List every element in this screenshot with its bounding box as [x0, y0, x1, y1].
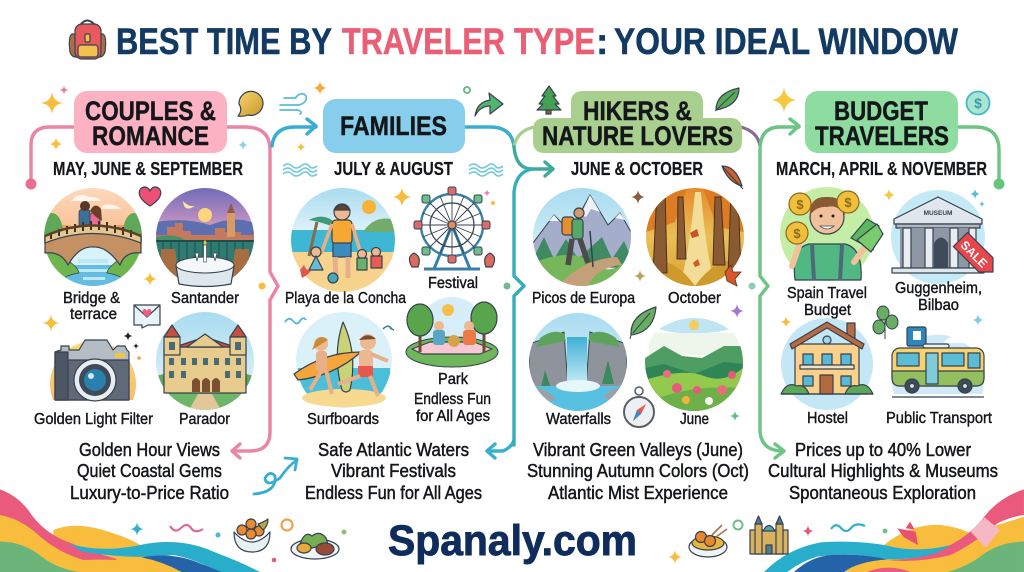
illustration: museum: MUSEUM	[924, 210, 952, 217]
highlights: hikers: Stunning Autumn Colors (Oct)	[527, 460, 749, 481]
illustration: hostel	[781, 318, 873, 410]
icon: compass	[624, 387, 654, 427]
illustration: bridge and couple	[41, 188, 145, 286]
label: Guggenheim Bilbao: Guggenheim,	[895, 280, 982, 297]
footer decoration: left icons	[130, 519, 346, 562]
heading pill: hikers	[533, 91, 742, 153]
connector dot: couples	[26, 178, 36, 190]
icon: gold speech bubble	[238, 91, 263, 116]
icon: dollar coin	[966, 92, 990, 114]
months: couples: MAY, JUNE & SEPTEMBER	[53, 158, 243, 179]
connector: families line	[272, 119, 514, 458]
highlights: budget: Prices up to 40% Lower	[795, 439, 971, 460]
illustration: Parador building	[156, 312, 254, 410]
heading pill: families: FAMILIES	[340, 111, 447, 141]
heading pill: hikers: NATURE LOVERS	[542, 121, 733, 151]
arrow: curly connector	[254, 458, 297, 494]
label: bridge and terrace: terrace	[70, 306, 117, 323]
label: Guggenheim Bilbao: Bilbao	[918, 297, 959, 314]
illustration: waterfall	[529, 313, 627, 411]
heading pill: couples: COUPLES &	[85, 96, 216, 126]
label: June: June	[680, 411, 709, 428]
label: Spain Travel Budget	[787, 285, 867, 319]
illustration: museum: SALE	[958, 238, 990, 271]
label: Santander: Santander	[171, 290, 240, 307]
illustration: Santander terrace at dusk	[156, 188, 254, 286]
highlights: budget	[768, 439, 998, 503]
icon: curry bowl	[689, 525, 727, 557]
label: Guggenheim Bilbao	[895, 280, 982, 314]
icon: leaf top	[715, 88, 739, 111]
panel: budget travelers	[768, 91, 1000, 503]
title: TYPE	[514, 21, 595, 62]
title: :	[596, 21, 608, 62]
icon: gold sparkle beside beach	[392, 188, 412, 206]
panel: families	[285, 99, 498, 503]
heading pill: budget: BUDGET	[834, 96, 928, 126]
heading pill: families	[323, 99, 465, 153]
highlights: families: Endless Fun for All Ages	[305, 482, 482, 503]
connector: couples line	[31, 127, 278, 458]
illustration: park picnic	[406, 297, 498, 367]
label: park: Endless Fun	[414, 391, 491, 408]
highlights: budget: Spontaneous Exploration	[789, 482, 976, 503]
illustration: budget traveler: $	[793, 226, 801, 241]
label: park: for All Ages	[416, 408, 490, 425]
highlights: hikers	[527, 439, 749, 503]
icon: cathedral	[750, 516, 788, 554]
label: Parador: Parador	[179, 411, 231, 428]
icon: purple sparkle	[730, 304, 744, 318]
label: Hostel: Hostel	[807, 410, 848, 427]
icon: leaf sprig	[873, 306, 898, 339]
heading pill: hikers: HIKERS &	[583, 96, 692, 126]
icon: green arrow	[475, 93, 503, 116]
icon: wave marks	[283, 164, 503, 176]
illustration: ferris wheel	[409, 187, 495, 269]
icon: love letter	[134, 305, 160, 328]
illustration: budget traveler: $	[844, 195, 852, 210]
footer decoration: right icons	[668, 516, 887, 564]
highlights: families: Safe Atlantic Waters	[318, 439, 469, 460]
icon: autumn leaf	[722, 166, 743, 189]
footer wave: right	[764, 489, 1024, 572]
illustration: budget traveler	[780, 187, 883, 281]
heading pill: budget: TRAVELERS	[815, 121, 949, 151]
label: October: October	[668, 290, 722, 307]
illustration: beach family	[291, 188, 395, 292]
illustration: museum	[891, 190, 1000, 284]
icon: dollar coin: $	[974, 95, 982, 111]
illustration: surfers	[294, 312, 392, 408]
connector: purple link	[741, 127, 760, 146]
illustration: green valley	[645, 313, 743, 411]
label: Surfboards: Surfboards	[307, 411, 379, 428]
footer brand: Spanaly.com	[388, 517, 637, 565]
highlights: families	[305, 439, 482, 503]
icon: wind lines	[280, 94, 306, 114]
icon: backpack	[69, 20, 106, 59]
icon: heart	[139, 187, 161, 206]
title: YOUR IDEAL WINDOW	[614, 21, 958, 62]
label: bridge and terrace: Bridge &	[63, 290, 120, 307]
label: Picos de Europa: Picos de Europa	[532, 290, 635, 307]
label: park	[414, 371, 491, 425]
highlights: couples: Golden Hour Views	[79, 439, 220, 460]
connector: budget line	[760, 119, 999, 458]
label: Spain Travel Budget: Spain Travel	[787, 285, 867, 302]
highlights: couples	[70, 439, 229, 503]
connector: hikers line	[514, 147, 553, 445]
highlights: couples: Quiet Coastal Gems	[77, 460, 222, 481]
icon: green leaf	[630, 307, 656, 339]
label: Playa de la Concha: Playa de la Concha	[285, 290, 406, 307]
title: BEST TIME BY	[116, 21, 332, 62]
title	[116, 21, 958, 62]
highlights: hikers: Vibrant Green Valleys (June)	[533, 439, 743, 460]
connector: sage link	[514, 127, 535, 147]
label: Waterfalls: Waterfalls	[546, 411, 611, 428]
heading pill: budget	[805, 91, 958, 153]
illustration: autumn forest	[646, 188, 744, 286]
icon: salad plate	[291, 533, 339, 559]
icon: pine tree	[537, 86, 561, 114]
title: TRAVELER	[342, 21, 505, 62]
label: park: Park	[438, 371, 469, 388]
months: hikers: JUNE & OCTOBER	[571, 158, 703, 179]
decorative accents: sparkles and dots	[41, 81, 985, 421]
label: Golden Light Filter: Golden Light Filter	[34, 411, 154, 428]
footer wave: left	[0, 489, 260, 572]
label: Festival: Festival	[428, 275, 478, 292]
illustration: budget traveler: $	[796, 197, 804, 212]
label: Public Transport: Public Transport	[886, 410, 993, 427]
highlights: budget: Cultural Highlights & Museums	[768, 460, 998, 481]
panel: couples and romance	[34, 91, 254, 503]
connector dot: budget	[994, 178, 1004, 190]
heading pill: couples: ROMANCE	[92, 121, 209, 151]
highlights: families: Vibrant Festivals	[331, 460, 456, 481]
months: families: JULY & AUGUST	[334, 158, 454, 179]
heading pill: couples	[74, 91, 227, 153]
illustration: camera	[50, 340, 136, 401]
panel: hikers and nature lovers	[527, 91, 749, 503]
label: Spain Travel Budget: Budget	[804, 302, 852, 319]
highlights: hikers: Atlantic Mist Experience	[548, 482, 728, 503]
highlights: couples: Luxury-to-Price Ratio	[70, 482, 229, 503]
illustration: mountain hiker	[530, 188, 634, 286]
icon: bowl of fruit	[234, 519, 270, 552]
illustration: bus	[892, 327, 984, 397]
label: bridge and terrace	[63, 290, 120, 323]
